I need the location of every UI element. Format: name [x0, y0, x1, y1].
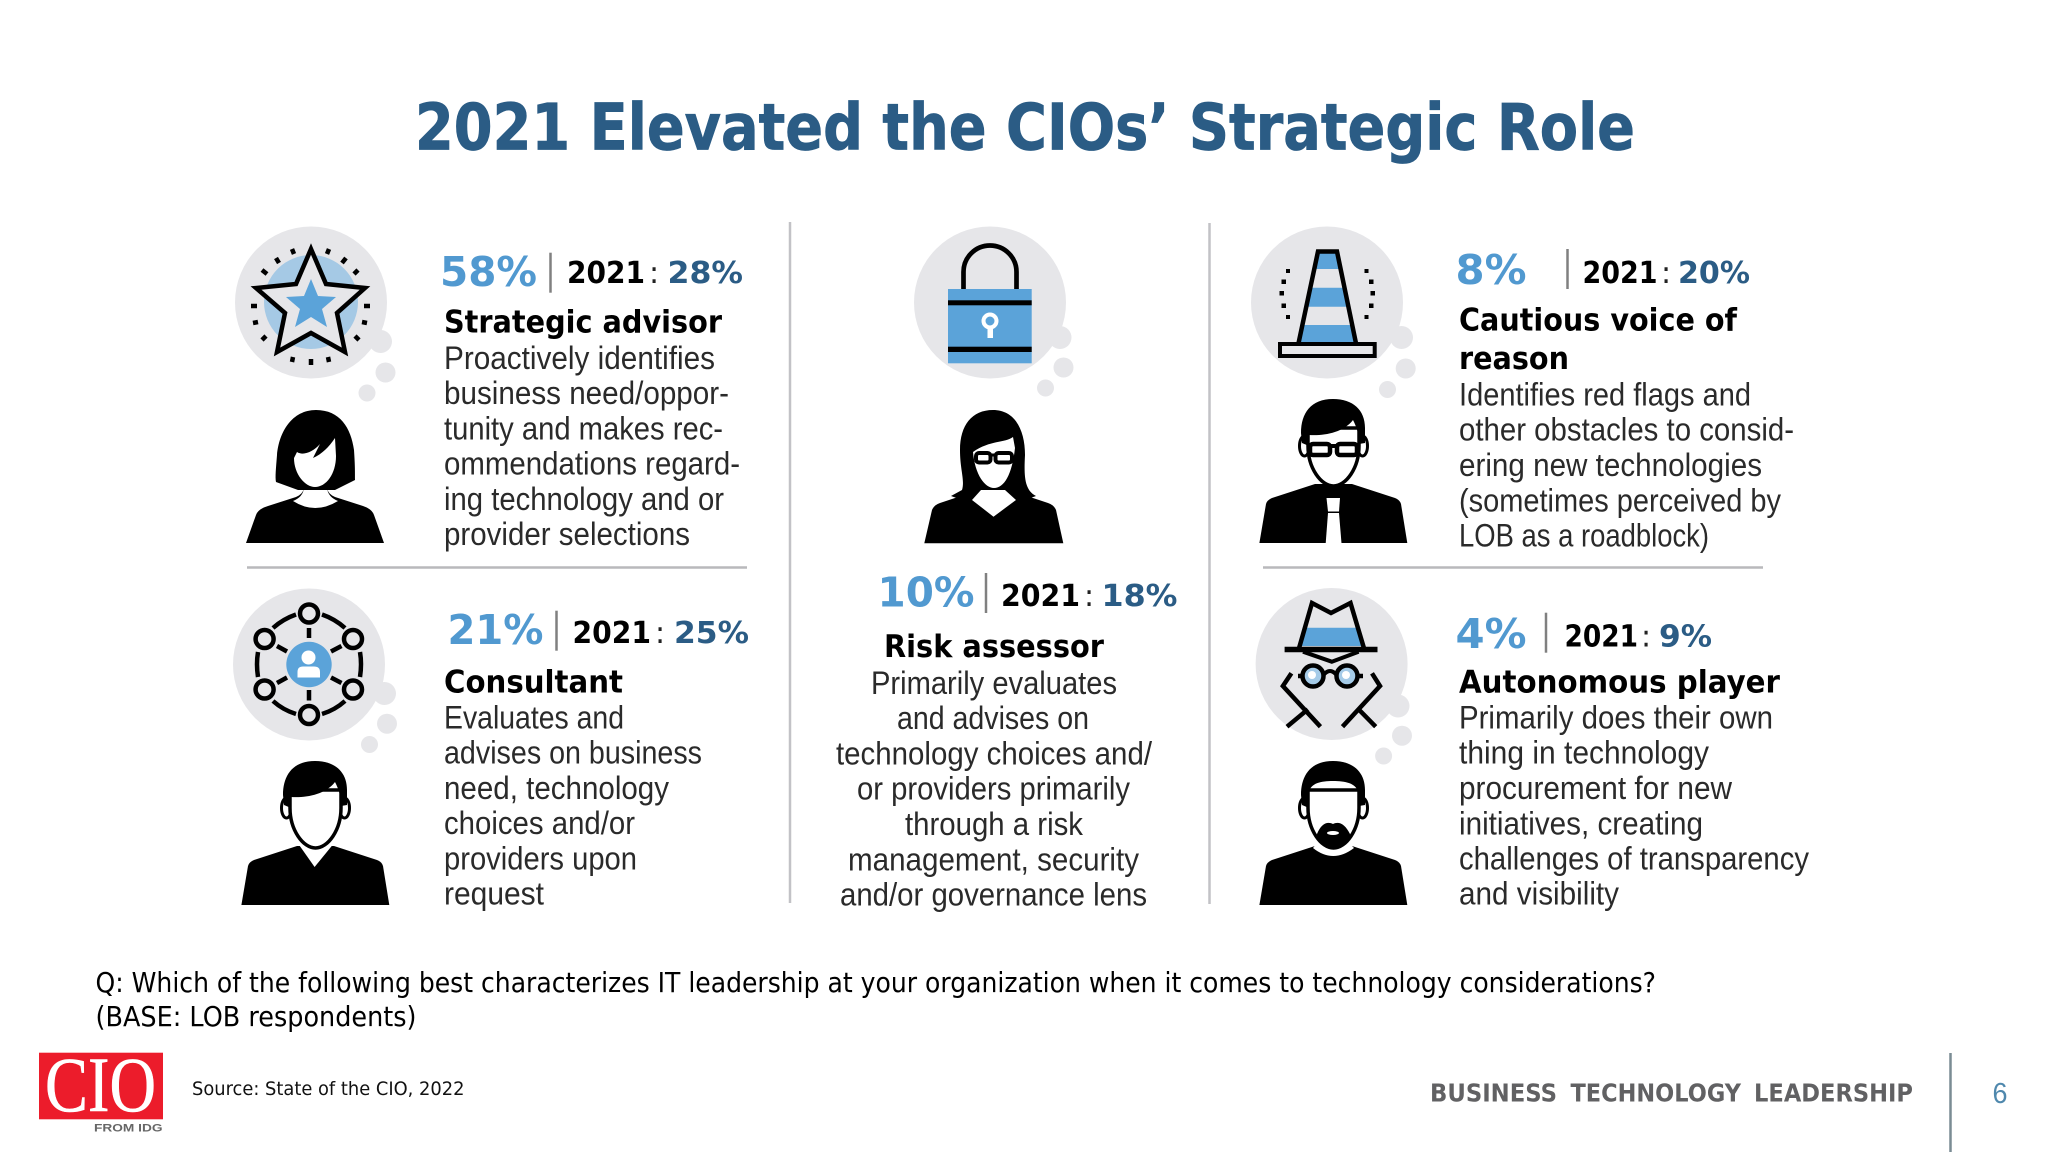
stat: 4% versus 2021 9%: 4% [1456, 610, 1526, 658]
heading: cautious voice of reason [1459, 302, 1737, 377]
text block: autonomous player description: Primarily does their own [1459, 700, 1773, 736]
text block: consultant description: choices and/or [444, 805, 635, 841]
stat: 21% versus 2021 25%: 2021 [572, 616, 651, 651]
text block: risk assessor description: Primarily evaluates [871, 665, 1117, 701]
stat: 8% versus 2021 20% [1456, 246, 1750, 294]
text block: consultant description: request [444, 876, 544, 912]
heading: cautious voice of reason: Cautious voice of [1459, 302, 1737, 338]
stat: 10% versus 2021 18% [878, 568, 1178, 616]
text block: autonomous player description [1459, 700, 1809, 912]
panel: consultant [233, 588, 749, 912]
stat: 58% versus 2021 28% [440, 248, 743, 296]
stat: 21% versus 2021 25% [448, 606, 749, 654]
footer tagline: LEADERSHIP [1754, 1078, 1913, 1108]
text block: cautious voice description: other obstacles to consid- [1459, 412, 1794, 448]
icon: network thought bubble [233, 588, 397, 753]
text block: cautious voice description [1459, 376, 1794, 554]
text block: strategic advisor description: Proactively identifies [444, 340, 715, 376]
text block: autonomous player description: procurement for new [1459, 770, 1733, 806]
stat: 8% versus 2021 20%: 8% [1456, 246, 1526, 294]
stat: 4% versus 2021 9%: 2021 [1564, 620, 1638, 654]
text block: strategic advisor description: provider selections [444, 516, 690, 552]
text block: autonomous player description: initiatives, creating [1459, 806, 1703, 842]
footer tagline [1430, 1078, 1913, 1108]
text block: consultant description: providers upon [444, 840, 637, 876]
stat: 21% versus 2021 25%: : [655, 616, 665, 651]
heading: cautious voice of reason: reason [1459, 341, 1569, 377]
stat: 4% versus 2021 9% [1456, 610, 1712, 658]
text block: cautious voice description: ering new technologies [1459, 447, 1762, 483]
text block: risk assessor description: through a risk [905, 806, 1084, 842]
text block: consultant description: advises on business [444, 734, 702, 770]
panel: risk assessor [836, 226, 1178, 912]
person: man with glasses and tie [1259, 399, 1407, 543]
panel: strategic advisor [235, 226, 743, 552]
text block: survey question [96, 966, 1656, 1033]
stat: 4% versus 2021 9%: : [1641, 620, 1651, 654]
text block: risk assessor description [836, 665, 1152, 912]
text block: strategic advisor description: business need/oppor- [444, 375, 729, 411]
heading: consultant: Consultant [444, 664, 623, 700]
stat: 58% versus 2021 28%: 58% [440, 248, 537, 296]
text block: risk assessor description: management, security [848, 842, 1139, 878]
stat: 10% versus 2021 18%: : [1084, 579, 1094, 614]
stat: 8% versus 2021 20%: 20% [1678, 256, 1750, 291]
text block: strategic advisor description: ing technology and or [444, 481, 724, 517]
stat: 10% versus 2021 18%: 18% [1102, 579, 1178, 614]
heading: strategic advisor: Strategic advisor [444, 304, 723, 340]
text block: risk assessor description: and/or governance lens [840, 876, 1147, 912]
person: man with v-neck [241, 761, 389, 905]
stat: 10% versus 2021 18%: 10% [878, 568, 974, 616]
text block: consultant description [444, 700, 702, 912]
text block: autonomous player description: and visibility [1459, 876, 1619, 912]
text block: cautious voice description: (sometimes perceived by [1459, 482, 1781, 518]
logo: CIO from IDG: FROM IDG [94, 1122, 162, 1134]
stat: 58% versus 2021 28%: 28% [668, 256, 743, 291]
footer tagline: BUSINESS [1430, 1078, 1557, 1108]
stat: 8% versus 2021 20%: 2021 [1582, 256, 1658, 291]
logo: CIO from IDG: CIO [45, 1041, 156, 1128]
panel: autonomous player [1256, 588, 1809, 912]
text block: risk assessor description: and advises on [897, 700, 1089, 736]
text block: survey question: (BASE: LOB respondents) [96, 1000, 416, 1033]
text block: risk assessor description: or providers primarily [857, 770, 1130, 806]
text block: consultant description: Evaluates and [444, 700, 624, 736]
heading: risk assessor: Risk assessor [884, 629, 1105, 665]
footer tagline: TECHNOLOGY [1570, 1078, 1742, 1108]
heading: autonomous player: Autonomous player [1459, 664, 1781, 700]
person: woman with bob haircut [246, 410, 384, 543]
text block: survey question: Q: Which of the following best characterizes IT leadership at your organization when it comes to technology considerations? [96, 966, 1656, 999]
person: woman with glasses [924, 410, 1063, 543]
stat: 4% versus 2021 9%: 9% [1659, 620, 1712, 654]
icon: star thought bubble [235, 226, 396, 402]
title: 2021 Elevated the CIOs’ Strategic Role [415, 92, 1635, 166]
text block: strategic advisor description: tunity and makes rec- [444, 410, 723, 446]
source note: Source: State of the CIO, 2022 [192, 1078, 464, 1100]
text block: autonomous player description: challenges of transparency [1459, 840, 1809, 876]
panel: cautious voice of reason [1251, 226, 1794, 554]
stat: 21% versus 2021 25%: 25% [674, 616, 749, 651]
text block: consultant description: need, technology [444, 770, 669, 806]
page number: 6 [1992, 1078, 2008, 1110]
icon: spy thought bubble [1256, 588, 1412, 764]
stat: 8% versus 2021 20%: : [1661, 256, 1671, 291]
icon: traffic cone thought bubble [1251, 226, 1416, 398]
text block: risk assessor description: technology choices and/ [836, 736, 1152, 772]
text block: cautious voice description: LOB as a roadblock) [1459, 518, 1709, 554]
stat: 10% versus 2021 18%: 2021 [1001, 579, 1080, 614]
stat: 58% versus 2021 28%: : [649, 256, 659, 291]
person: bearded man [1259, 761, 1407, 905]
text block: strategic advisor description [444, 340, 740, 552]
text block: autonomous player description: thing in technology [1459, 734, 1709, 770]
stat: 21% versus 2021 25%: 21% [448, 606, 544, 654]
stat: 58% versus 2021 28%: 2021 [567, 256, 645, 291]
text block: strategic advisor description: ommendations regard- [444, 446, 740, 482]
text block: cautious voice description: Identifies red flags and [1459, 376, 1751, 412]
icon: padlock thought bubble [914, 226, 1074, 396]
